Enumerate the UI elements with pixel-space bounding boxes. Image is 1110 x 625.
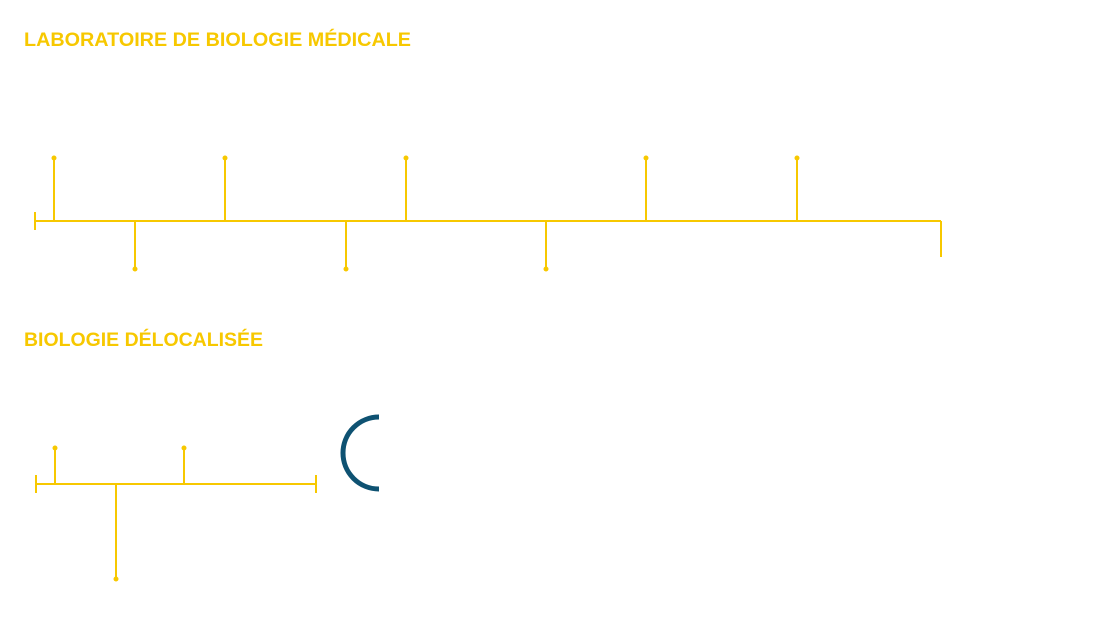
timeline: délocalisée (36, 446, 316, 582)
timeline: laboratoire (35, 156, 941, 272)
title: biologie délocalisée: BIOLOGIE DÉLOCALISÉE (24, 329, 263, 351)
title: laboratoire: LABORATOIRE DE BIOLOGIE MÉDICALE (24, 29, 411, 51)
icon: arc (343, 417, 379, 489)
